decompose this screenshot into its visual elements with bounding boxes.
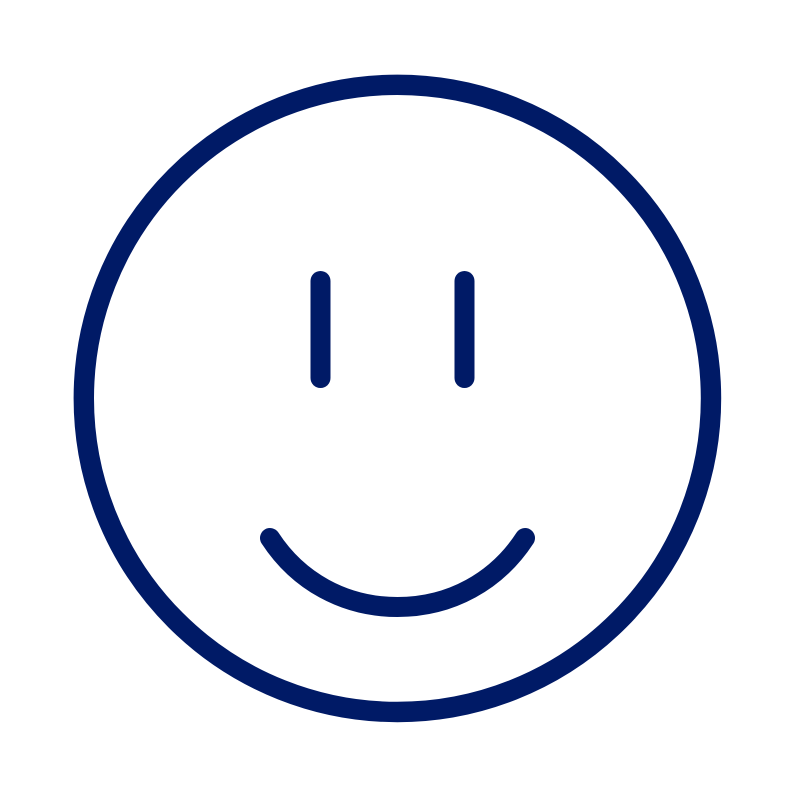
face outline (84, 85, 711, 712)
right eye (454, 281, 474, 378)
smile (270, 538, 525, 607)
left eye (310, 281, 330, 378)
icon: smiley face (84, 85, 711, 712)
